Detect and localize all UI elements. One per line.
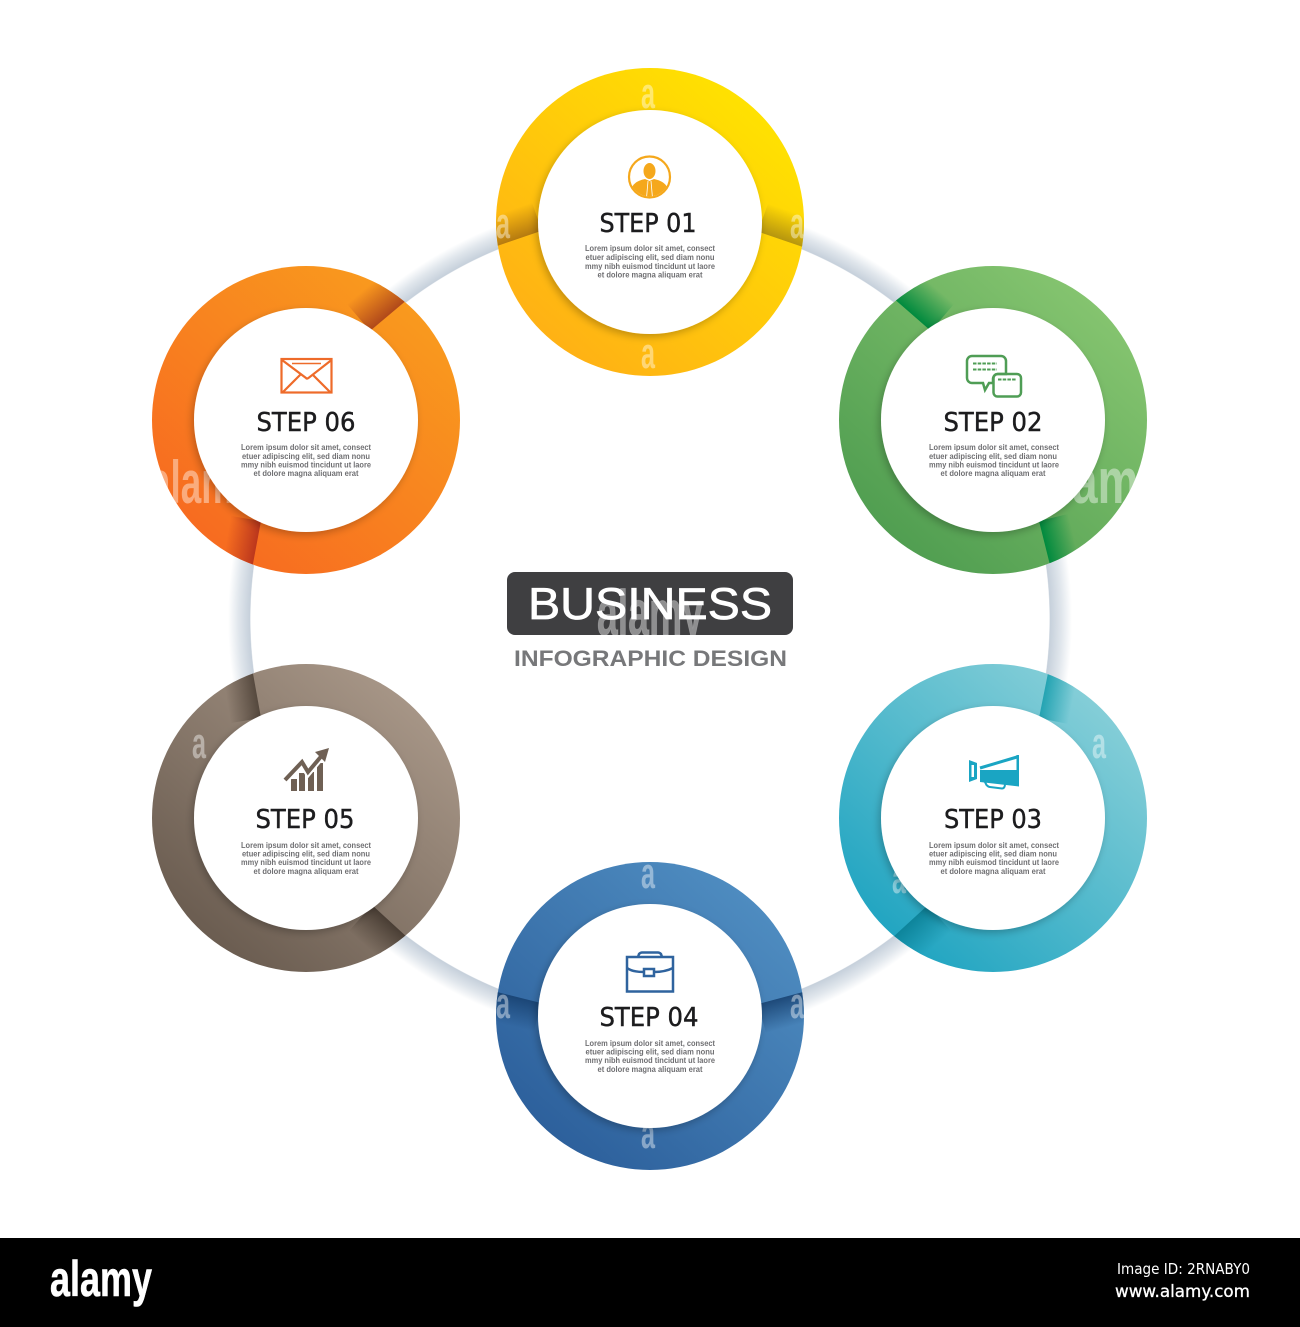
icon: businessman bbox=[629, 156, 670, 198]
panel: step 05 bbox=[152, 664, 460, 972]
body text bbox=[929, 841, 1060, 876]
body text: etuer adipiscing elit, sed diam nonu bbox=[242, 850, 370, 858]
watermarks bbox=[496, 849, 804, 1158]
heading: step 06: STEP 06 bbox=[256, 408, 356, 438]
panel: step 03 bbox=[839, 664, 1147, 972]
body text: Lorem ipsum dolor sit amet, consect bbox=[241, 841, 371, 850]
title: business bbox=[507, 572, 793, 635]
footer logo: alamy bbox=[50, 1251, 152, 1307]
body text: et dolore magna aliquam erat bbox=[598, 1065, 703, 1074]
panel: step 02 bbox=[839, 266, 1164, 574]
body text bbox=[241, 841, 372, 876]
watermarks: a bbox=[641, 69, 655, 118]
body text: Lorem ipsum dolor sit amet, consect bbox=[585, 1039, 715, 1048]
subtitle: INFOGRAPHIC DESIGN bbox=[514, 646, 787, 671]
body text: et dolore magna aliquam erat bbox=[940, 469, 1046, 478]
ring fold shadows bbox=[896, 282, 1139, 564]
heading: step 03: STEP 03 bbox=[944, 805, 1042, 835]
green ring bbox=[839, 266, 1147, 574]
watermarks: a bbox=[641, 1109, 655, 1158]
watermarks: a bbox=[1092, 719, 1106, 768]
watermark: a bbox=[192, 719, 206, 768]
white inner disc bbox=[538, 110, 762, 334]
panel: step 04 bbox=[496, 862, 804, 1170]
title text: BUSINESS bbox=[528, 580, 772, 629]
white inner disc bbox=[538, 904, 762, 1128]
teal ring bbox=[839, 664, 1147, 972]
body text: Lorem ipsum dolor sit amet, consect bbox=[241, 443, 371, 452]
body text: mmy nibh euismod tincidunt ut laore bbox=[929, 460, 1060, 470]
body text bbox=[241, 443, 372, 478]
body text: mmy nibh euismod tincidunt ut laore bbox=[241, 460, 372, 470]
icon: megaphone bbox=[969, 755, 1019, 788]
body text bbox=[585, 244, 716, 280]
body text: etuer adipiscing elit, sed diam nonu bbox=[586, 1048, 715, 1056]
body text: Lorem ipsum dolor sit amet, consect bbox=[585, 244, 715, 253]
body text: et dolore magna aliquam erat bbox=[598, 270, 703, 280]
white inner disc bbox=[881, 308, 1105, 532]
watermark: alam bbox=[150, 449, 234, 516]
watermarks: a bbox=[790, 199, 804, 248]
heading: step 02: STEP 02 bbox=[944, 408, 1042, 438]
watermarks: a bbox=[496, 979, 510, 1028]
body text: mmy nibh euismod tincidunt ut laore bbox=[929, 858, 1060, 867]
watermarks: a bbox=[790, 979, 804, 1028]
yellow ring bbox=[496, 68, 804, 376]
brown ring bbox=[152, 664, 460, 972]
body text: etuer adipiscing elit, sed diam nonu bbox=[929, 452, 1057, 461]
watermarks: a bbox=[892, 854, 906, 903]
body text: etuer adipiscing elit, sed diam nonu bbox=[242, 452, 370, 461]
body text: mmy nibh euismod tincidunt ut laore bbox=[241, 858, 372, 867]
website: www.alamy.com bbox=[1115, 1282, 1250, 1302]
body text: Lorem ipsum dolor sit amet, consect bbox=[929, 841, 1059, 850]
ring fold shadows bbox=[892, 668, 1078, 964]
panel: step 01 bbox=[483, 68, 817, 378]
body text: mmy nibh euismod tincidunt ut laore bbox=[585, 1056, 716, 1065]
body text: et dolore magna aliquam erat bbox=[940, 867, 1046, 876]
body text: Lorem ipsum dolor sit amet, consect bbox=[929, 443, 1059, 452]
body text: et dolore magna aliquam erat bbox=[254, 469, 359, 478]
connecting ring bbox=[228, 197, 1072, 1041]
ring fold shadows bbox=[160, 284, 405, 564]
image id: Image ID: 2RNABY0 bbox=[1117, 1260, 1250, 1278]
title box bbox=[507, 572, 793, 635]
body text: etuer adipiscing elit, sed diam nonu bbox=[586, 253, 715, 262]
body text bbox=[929, 443, 1060, 478]
white inner disc bbox=[194, 308, 418, 532]
white inner disc bbox=[194, 706, 418, 930]
body text: et dolore magna aliquam erat bbox=[254, 867, 359, 876]
watermarks: a bbox=[641, 849, 655, 898]
white inner disc bbox=[881, 706, 1105, 930]
blue ring bbox=[496, 862, 804, 1170]
watermarks bbox=[892, 719, 1106, 903]
body text: etuer adipiscing elit, sed diam nonu bbox=[929, 850, 1057, 858]
icon: growth chart bbox=[285, 748, 329, 791]
watermarks: a bbox=[641, 329, 655, 378]
heading: step 05: STEP 05 bbox=[256, 805, 354, 835]
center watermark: alamy bbox=[597, 577, 703, 649]
ring fold shadows bbox=[496, 84, 804, 368]
icon: briefcase bbox=[627, 952, 673, 992]
body text: mmy nibh euismod tincidunt ut laore bbox=[585, 262, 716, 271]
watermark: amy bbox=[1072, 445, 1164, 517]
body text bbox=[585, 1039, 716, 1074]
footer bar bbox=[0, 1238, 1300, 1327]
watermarks: a bbox=[496, 199, 510, 248]
watermarks bbox=[496, 69, 804, 378]
heading: step 04: STEP 04 bbox=[600, 1003, 698, 1033]
icon: chat bubbles bbox=[967, 356, 1021, 396]
icon: envelope bbox=[282, 359, 332, 392]
ring fold shadows bbox=[496, 864, 804, 1148]
heading: step 01: STEP 01 bbox=[600, 209, 696, 239]
orange ring bbox=[152, 266, 460, 574]
panel: step 06 bbox=[150, 266, 460, 574]
ring fold shadows bbox=[229, 674, 406, 952]
